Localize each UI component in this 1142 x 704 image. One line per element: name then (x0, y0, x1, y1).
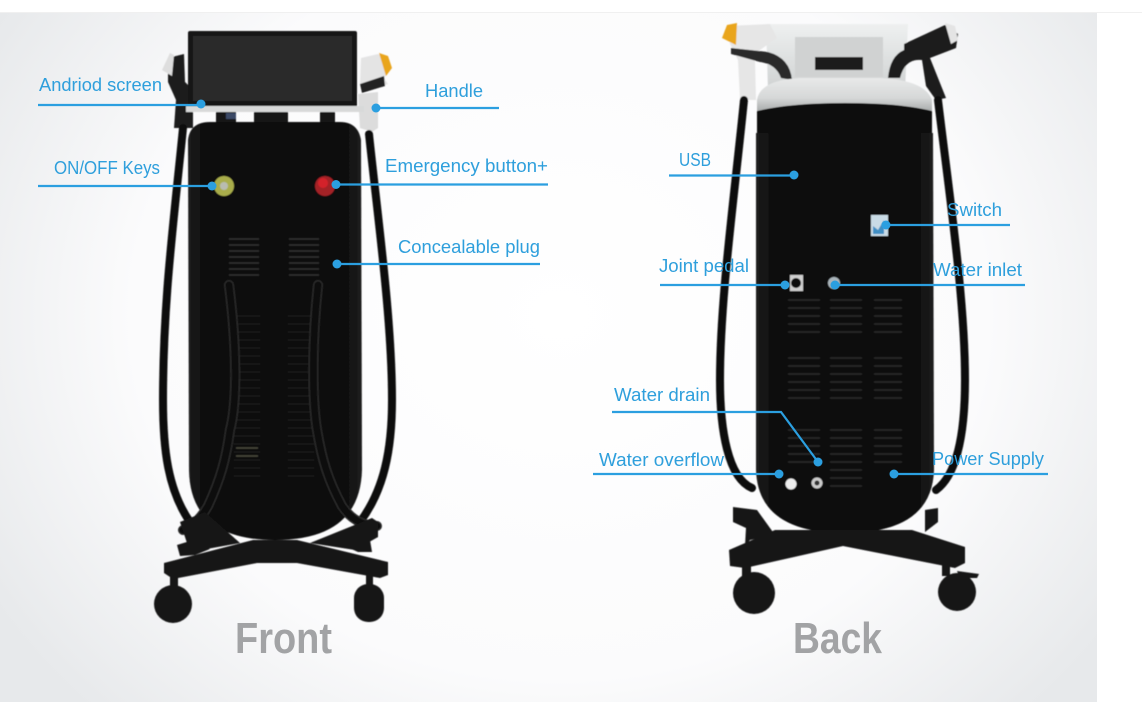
water connectors (786, 478, 822, 490)
callout: Joint pedal (659, 256, 790, 290)
back machine (720, 23, 979, 614)
emergency button (315, 176, 335, 196)
heading: Front: Front (235, 614, 332, 663)
callout: ON/OFF Keys (38, 158, 216, 190)
front screen (186, 31, 364, 112)
back body (756, 133, 934, 533)
back vents (788, 300, 902, 486)
callout: USB: USB (679, 150, 711, 170)
front stem brackets (216, 108, 335, 142)
switch (871, 215, 888, 236)
callout: Switch: Switch (947, 200, 1002, 220)
front lower panel (205, 224, 343, 525)
back silver hood (757, 78, 932, 133)
callout: Andriod screen (38, 75, 206, 108)
heading: Back: Back (793, 614, 882, 663)
callout: Power Supply (890, 449, 1048, 478)
front outer cables (163, 128, 392, 522)
callout: Handle: Handle (425, 81, 483, 101)
joint pedal connector (790, 275, 803, 291)
callout: Emergency button+: Emergency button+ (385, 156, 548, 176)
callout: ON/OFF Keys: ON/OFF Keys (54, 158, 160, 178)
callout: Water drain (612, 385, 822, 466)
front inner cables (183, 285, 377, 530)
front base and casters (154, 512, 388, 623)
callout: Water drain: Water drain (614, 385, 710, 405)
callout: Water inlet: Water inlet (933, 260, 1022, 280)
front left handle (162, 53, 193, 128)
front body (188, 122, 362, 540)
callout: Water overflow: Water overflow (599, 450, 725, 470)
on/off key (214, 176, 234, 196)
callout: Joint pedal: Joint pedal (659, 256, 749, 276)
callout: Power Supply: Power Supply (932, 449, 1044, 469)
callout: USB (669, 150, 798, 180)
front right handle (358, 53, 392, 132)
back left handle (722, 23, 792, 100)
callout: Concealable plug (332, 237, 540, 268)
back right handle (888, 23, 958, 100)
callout: Water inlet (830, 260, 1025, 290)
back outer cables (720, 100, 965, 490)
back base and casters (729, 507, 979, 614)
callout: Concealable plug: Concealable plug (398, 237, 540, 257)
water inlet connector (828, 277, 840, 289)
callout: Handle (372, 81, 499, 112)
back rear panel (766, 24, 908, 90)
callout: Water overflow (593, 450, 784, 478)
callout: Andriod screen: Andriod screen (39, 75, 162, 95)
callout: Emergency button+ (332, 156, 548, 189)
callout: Switch (882, 200, 1010, 230)
front machine (154, 31, 392, 623)
